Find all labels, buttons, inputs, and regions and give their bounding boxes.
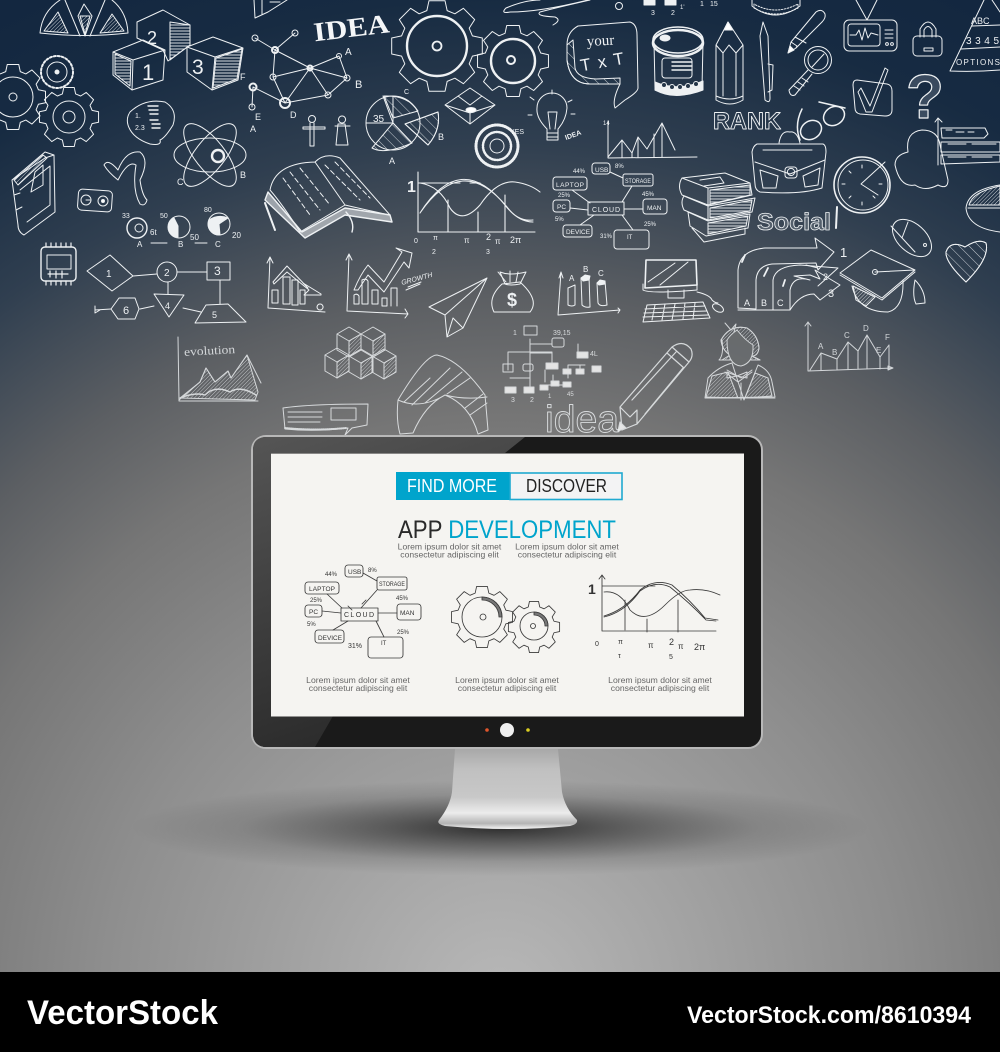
icon: glasses — [797, 102, 848, 143]
screen chart: curves: 2 — [669, 637, 674, 647]
icon: numbered cubes: 2 — [147, 28, 157, 48]
label: Social: Social — [757, 209, 831, 236]
screen diagram: cloud network: CLOUD — [344, 612, 374, 619]
diagram: org chart — [503, 326, 601, 404]
icon: left gears — [0, 56, 99, 147]
icon: money bag — [492, 271, 533, 312]
chart: growth bars: GROWTH — [401, 272, 434, 287]
icon: network graph: F — [240, 72, 246, 82]
icon: network graph: A — [250, 124, 256, 134]
icon: pyramid: OPTIONS — [956, 58, 1000, 67]
icon: paper airplane — [429, 278, 487, 337]
label: idea handwriting: idea — [545, 399, 620, 441]
icon: three way arrows: 3 — [828, 288, 834, 300]
icon: pie chart: 35 — [373, 114, 385, 125]
screen diagram: cloud network: 8% — [368, 568, 377, 574]
icon: pie chart: B — [438, 132, 444, 142]
screen chart: curves: π — [678, 642, 684, 651]
chart: curves chart: 2 — [432, 249, 436, 256]
diagram: org chart: 1 — [513, 330, 517, 337]
screen chart: curves: τ — [618, 653, 621, 660]
icon: cropped small org chart: 3 — [651, 10, 655, 17]
chart: evolution: evolution — [184, 342, 235, 359]
screen diagram: cloud network: DEVICE — [318, 635, 343, 642]
icon: network graph: D — [290, 110, 297, 120]
caption 1: consectetur adipiscing elit — [309, 683, 408, 693]
intro text left — [398, 542, 502, 560]
diagram: flowchart: 1 — [106, 269, 112, 280]
icon: pen — [760, 22, 773, 102]
icon: desktop computer — [643, 260, 725, 322]
screen diagram: cloud network: USB — [348, 569, 361, 576]
diagram: flowchart: 5 — [212, 310, 217, 320]
icon: open book — [265, 156, 392, 238]
chart: letter line chart: E — [876, 346, 881, 355]
screen chart: curves: 5 — [669, 654, 673, 661]
icon: magnifier — [789, 46, 832, 95]
chart: small pies — [122, 207, 241, 249]
icon: target: YES — [510, 129, 524, 136]
icon: atom — [174, 116, 246, 194]
icon: pie chart — [366, 89, 444, 166]
screen diagram: cloud network: 31% — [348, 643, 362, 650]
chart: letter line chart: D — [863, 324, 869, 333]
diagram: cloud network: MAN — [647, 205, 662, 212]
chart: small pies: 80 — [204, 207, 212, 214]
screen chart: curves: 0 — [595, 641, 599, 648]
chart: curves chart: 2 — [486, 232, 491, 242]
chart: curves chart: π — [433, 235, 438, 242]
diagram: cloud network: 25% — [644, 222, 657, 228]
screen chart: curves: 2π — [694, 642, 705, 652]
chart: small pies: 50 — [160, 213, 168, 220]
icon: pie chart: C — [404, 89, 409, 96]
icon: question mark: ? — [906, 63, 944, 132]
icon: banner — [283, 404, 368, 435]
chart: falling bars — [267, 257, 325, 312]
icon: mouse — [886, 212, 938, 264]
diagram: flowchart: 4 — [165, 301, 170, 311]
icon: pyramid: 3345 — [966, 36, 999, 47]
icon: cropped small org chart: 2 — [671, 10, 675, 17]
icon: clock — [834, 157, 890, 213]
icon: pencil small — [788, 10, 825, 53]
icon: briefcase — [752, 132, 826, 193]
icon: pencil — [716, 22, 743, 104]
diagram: cloud network: USB — [595, 167, 608, 174]
chart: 3d bars — [558, 265, 620, 315]
monitor — [252, 436, 762, 829]
icon: money bag: $ — [507, 290, 517, 310]
chart: curves chart — [407, 172, 540, 256]
monitor indicator lights — [485, 723, 530, 737]
caption 1 — [306, 675, 410, 693]
icon: graduation cap — [840, 250, 925, 312]
icon: checkbox — [853, 68, 892, 116]
icon: pyramid: ABC — [971, 16, 990, 26]
screen diagram: cloud network: STORAGE — [379, 581, 406, 588]
icon: numbered cubes — [113, 10, 243, 90]
chart: growth bars — [346, 248, 434, 318]
icon: cropped small org chart — [644, 0, 718, 17]
icon: cropped coin — [752, 0, 800, 15]
chart: small pies: 33 — [122, 213, 130, 220]
intro text right: Lorem ipsum dolor sit amet — [515, 542, 619, 552]
chart: small pies: A — [137, 240, 143, 249]
caption 3: Lorem ipsum dolor sit amet — [608, 675, 712, 685]
screen diagram: cloud network — [305, 565, 421, 658]
chart: small pies: C — [215, 240, 221, 249]
label: RANK: RANK — [713, 108, 782, 135]
button: discover: DISCOVER — [526, 476, 607, 496]
icon: chip — [41, 243, 76, 285]
chart: 3d bars: C — [598, 269, 604, 278]
icon: heart — [946, 241, 987, 282]
icon: network graph: E — [255, 112, 261, 122]
watermark bar — [0, 972, 1000, 1052]
chart: 3d bars: A — [569, 274, 575, 283]
icon: retro tv — [844, 0, 897, 51]
monitor bezel — [252, 436, 762, 748]
icon: stacked books — [680, 173, 755, 242]
icon: GO badge — [77, 189, 113, 212]
icon: cropped small org chart: 1 — [700, 1, 704, 8]
icon: note bubble — [127, 101, 174, 144]
caption 3: consectetur adipiscing elit — [611, 683, 710, 693]
diagram: org chart: 3 — [511, 397, 515, 404]
icon: three way arrows: C — [777, 298, 784, 308]
icon: light bulb — [528, 90, 582, 142]
button: find more — [396, 472, 510, 500]
diagram: flowchart: 6 — [123, 305, 129, 317]
chart: letter line chart: B — [832, 348, 837, 357]
icon: pyramid — [950, 0, 1000, 71]
monitor stand — [438, 749, 577, 829]
diagram: cloud network: 8% — [615, 164, 624, 170]
icon: network graph — [240, 30, 362, 134]
icon: your text speech bubble: your — [586, 33, 615, 50]
chart: evolution — [178, 337, 261, 401]
intro text right — [515, 542, 619, 560]
diagram: cloud network: 31% — [600, 234, 613, 240]
screen diagram: cloud network: 25% — [397, 630, 410, 636]
caption 2: Lorem ipsum dolor sit amet — [455, 675, 559, 685]
diagram: flowchart: 3 — [214, 264, 221, 278]
icon: squiggle numeral — [104, 152, 147, 205]
icon: pie chart: A — [389, 156, 395, 166]
intro text right: consectetur adipiscing elit — [518, 550, 617, 560]
icon: cropped small org chart: 1' — [680, 5, 684, 11]
diagram: org chart: 39,15 — [553, 330, 571, 337]
icon: target — [476, 125, 524, 167]
chart: letter line chart — [805, 322, 893, 371]
chart: letter line chart: C — [844, 331, 850, 340]
icon: your text speech bubble — [567, 22, 638, 108]
chart: curves chart: π — [495, 237, 501, 246]
chart: small pies: B — [178, 240, 183, 249]
chart: letter line chart: A — [818, 342, 824, 351]
icon: your text speech bubble: TxT — [579, 49, 625, 75]
chart: curves chart: 0 — [414, 238, 418, 245]
screen icon: gears — [451, 586, 560, 653]
screen diagram: cloud network: 45% — [396, 596, 409, 602]
diagram: flowchart — [87, 255, 246, 323]
chart: curves chart: 1 — [407, 179, 416, 196]
chart: curves chart: 2π — [510, 235, 521, 245]
chart: 3d bars: B — [583, 265, 588, 274]
button: find more: FIND MORE — [407, 476, 497, 496]
caption 1: Lorem ipsum dolor sit amet — [306, 675, 410, 685]
icon: cropped top book — [254, 0, 287, 18]
icon: businessman — [40, 0, 128, 36]
icon: woman avatar — [705, 323, 775, 400]
diagram: cloud network: DEVICE — [566, 229, 591, 236]
diagram: org chart: 2 — [530, 397, 534, 404]
diagram: cloud network: 45% — [642, 192, 655, 198]
intro text left: consectetur adipiscing elit — [400, 550, 499, 560]
diagram: org chart: 45 — [567, 392, 574, 398]
chart: small pies: 6t — [150, 228, 157, 237]
caption 2 — [455, 675, 559, 693]
icon: three way arrows: B — [761, 298, 767, 308]
icon: right pie — [966, 185, 1000, 232]
icon: tin can — [653, 27, 703, 96]
watermark right: VectorStock.com/8610394 — [687, 1002, 972, 1029]
icon: light bulb: IDEA — [564, 130, 582, 142]
diagram: cloud network: 25% — [558, 193, 571, 199]
chart: letter line chart: F — [885, 333, 890, 342]
diagram: cloud network: 44% — [573, 169, 586, 175]
chart: small pies: 50 — [190, 233, 199, 242]
screen diagram: cloud network: IT — [381, 641, 387, 647]
icon: three way arrows: 1 — [840, 245, 847, 260]
chart: small pies: 20 — [232, 231, 241, 240]
chart: mountain line chart — [603, 121, 697, 158]
screen diagram: cloud network: 44% — [325, 572, 338, 578]
icon: atom: C — [177, 177, 184, 187]
icon: three way arrows: A — [744, 298, 750, 308]
icon: three way arrows — [738, 238, 847, 310]
icon: large gears — [392, 1, 548, 96]
caption 3 — [608, 675, 712, 693]
diagram: org chart: 1 — [548, 394, 552, 400]
diagram: cloud network — [553, 163, 667, 249]
icon: hatched arch — [397, 355, 488, 434]
icon: stick figures — [303, 116, 350, 146]
caption 2: consectetur adipiscing elit — [458, 683, 557, 693]
screen chart: curves — [588, 575, 720, 661]
chart: curves chart: 3 — [486, 249, 490, 256]
chart: curves chart: π — [464, 236, 470, 245]
button: discover — [510, 473, 622, 500]
screen diagram: cloud network: 25% — [310, 598, 323, 604]
ground shadow — [130, 780, 870, 876]
screen chart: curves: π — [648, 641, 654, 650]
bezel gloss — [253, 437, 525, 747]
icon: network graph: A — [345, 47, 352, 58]
diagram: cloud network: CLOUD — [592, 207, 620, 214]
icon: cloud — [895, 130, 948, 188]
icon: cropped small org chart: 15 — [710, 1, 718, 8]
icon: padlock — [913, 22, 942, 56]
diagram: cloud network: IT — [627, 235, 633, 241]
icon: three way arrows: 2 — [823, 272, 828, 282]
chart: mountain line chart: 14 — [603, 121, 610, 127]
icon: large pencil — [618, 343, 692, 431]
title: IDEA: IDEA — [312, 8, 391, 47]
diagram: cloud network: PC — [557, 204, 566, 211]
icon: top scribble — [504, 0, 622, 25]
screen diagram: cloud network: LAPTOP — [309, 586, 335, 593]
icon: isometric cubes — [325, 327, 396, 379]
screen diagram: cloud network: PC — [309, 609, 318, 616]
icon: open box — [445, 88, 495, 124]
diagram: flowchart: 2 — [164, 268, 170, 279]
icon: numbered cubes: 1 — [142, 60, 154, 85]
screen chart: curves: 1 — [588, 581, 596, 597]
heading: app development: APP DEVELOPMENT — [398, 516, 616, 544]
watermark left: VectorStock — [27, 994, 218, 1032]
icon: note bubble: 1. — [135, 113, 141, 120]
icon: network graph: B — [355, 79, 362, 91]
diagram: cloud network: STORAGE — [625, 178, 652, 185]
icon: note bubble: 2.3 — [135, 125, 145, 132]
screen diagram: cloud network: MAN — [400, 610, 415, 617]
screen chart: curves: π — [618, 639, 623, 646]
screen — [271, 454, 744, 716]
intro text left: Lorem ipsum dolor sit amet — [398, 542, 502, 552]
icon: numbered cubes: 3 — [192, 56, 204, 79]
diagram: cloud network: 5% — [555, 217, 564, 223]
icon: book — [12, 152, 55, 235]
diagram: cloud network: LAPTOP — [556, 182, 584, 189]
icon: flags — [935, 118, 1000, 165]
doodle cloud — [0, 0, 1000, 441]
diagram: org chart: 4L — [590, 351, 598, 358]
icon: atom: B — [240, 170, 246, 180]
screen diagram: cloud network: 5% — [307, 622, 316, 628]
